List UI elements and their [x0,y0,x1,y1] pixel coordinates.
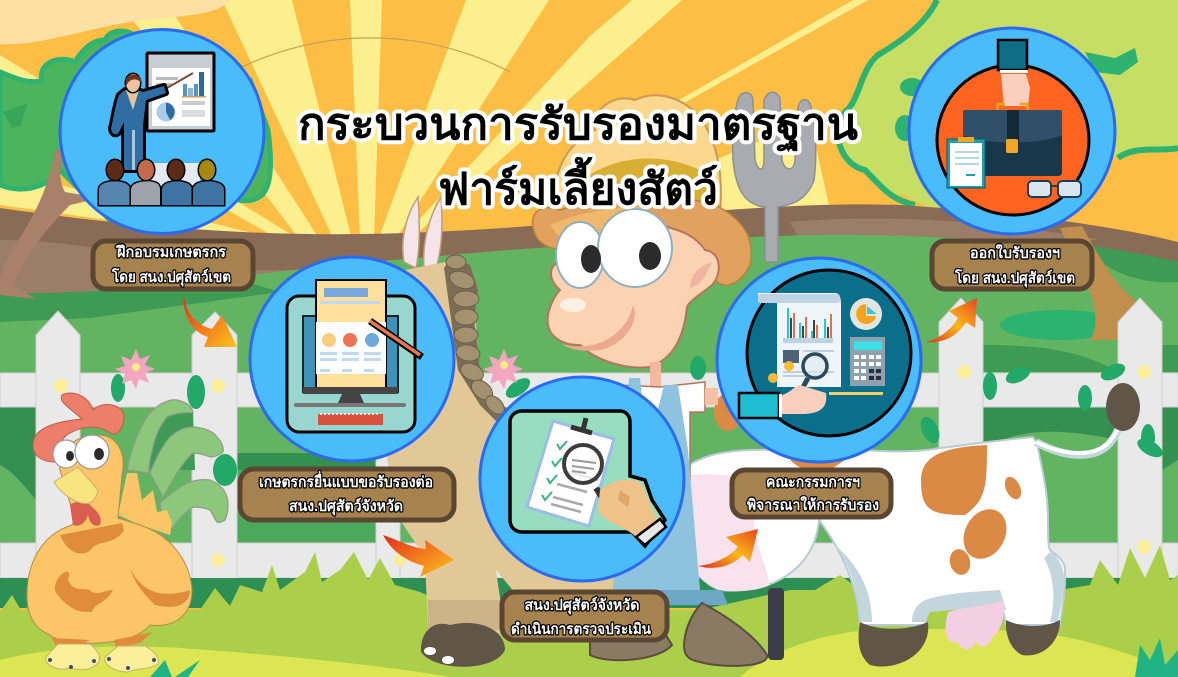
cow [671,383,1140,667]
arrow: step 1 to step 2 [184,295,237,347]
step 4 circle [717,258,921,462]
step 2 circle [250,257,454,461]
step 1 circle [60,30,264,234]
step 5 circle [909,28,1115,234]
arrow: step 3 to step 4 [698,529,758,568]
label: step 3: สนง.ปศุสัตว์จังหวัด [524,596,640,615]
donkey [387,197,640,667]
tree: left foliage [0,31,270,235]
label: step 4 [732,470,891,517]
title: กระบวนการรับรองมาตรฐาน [298,100,858,152]
label: step 5 [932,241,1092,289]
step 1 icon: presenter and audience [99,53,224,205]
label: step 2: เกษตรกรยื่นแบบขอรับรองต่อ [259,471,433,491]
step 5: certificate issued [909,28,1115,234]
step 2: farmer submits application [250,257,454,461]
farmer [533,95,767,666]
step 3 icon: clipboard and magnifier [510,411,666,546]
step 4: committee review [717,258,921,462]
step 3 circle [480,377,684,581]
arrow: step 2 to step 3 [383,535,454,577]
label: step 1: โดย สนง.ปศุสัตว์เขต [111,267,231,287]
step 5 icon: hand with briefcase [937,40,1089,215]
chicken [27,393,228,672]
light ground patches [0,629,1178,677]
pitchfork [733,92,816,660]
left tree trunk [0,150,100,299]
title [298,100,858,214]
dark grass shadow under fence [0,578,1178,608]
tree: right foliage [838,0,1178,211]
step 3: provincial office assessment [480,377,684,581]
step 1: training [60,30,264,234]
label: step 5: ออกใบรับรองฯ [970,244,1060,262]
label: step 2 [240,469,454,520]
step 4 icon: reports, calculator and hand with magnifier [739,270,911,436]
label: step 1 [93,241,253,289]
arrow: step 4 to step 5 [926,298,977,342]
label: step 1: ฝึกอบรมเกษตรกร [115,243,227,261]
label: step 2: สนง.ปศุสัตว์จังหวัด [289,497,403,516]
farmer face [548,209,719,368]
label: step 5: โดย สนง.ปศุสัตว์เขต [954,268,1075,288]
title: ฟาร์มเลี้ยงสัตว์ [438,156,718,214]
green vine leaves and pink flowers [111,349,1166,486]
step 2 icon: application on monitor [287,280,422,432]
label: step 4: คณะกรรมการฯ [766,474,860,491]
fence [0,298,1178,610]
grass [0,545,1178,677]
right tree trunk [1060,226,1135,340]
label: step 3 [502,592,667,640]
label: step 3: ดำเนินการตรวจประเมิน [511,620,652,638]
label: step 4: พิจารณาให้การรับรอง [747,496,879,514]
